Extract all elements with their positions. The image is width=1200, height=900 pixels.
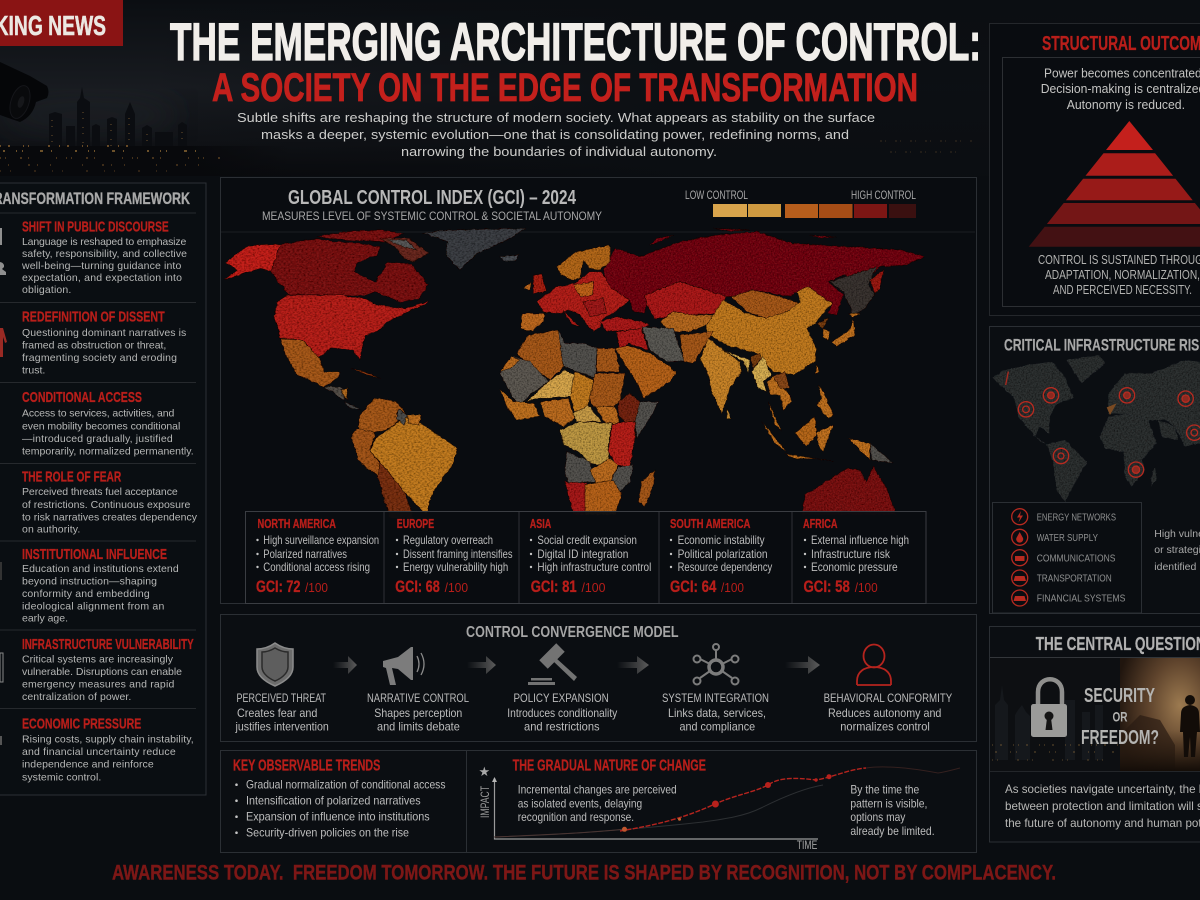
africa xyxy=(500,330,658,515)
table: regional summaries xyxy=(246,512,926,604)
image caption: OR xyxy=(1112,709,1128,725)
risk note: identified xyxy=(1154,561,1196,573)
region: south america: Resource dependency xyxy=(678,560,772,574)
arrow xyxy=(333,656,357,674)
region: africa: Infrastructure risk xyxy=(811,547,891,561)
region: europe: EUROPE xyxy=(397,517,434,531)
item: shift in public discourse: expectation, and expectation into xyxy=(22,272,182,284)
item: economic pressure: ECONOMIC PRESSURE xyxy=(22,715,141,732)
middle east xyxy=(600,317,713,398)
region: asia: ASIA xyxy=(530,517,551,531)
step descriptions: and limits debate xyxy=(377,720,460,734)
region: asia: GCI: 81 xyxy=(531,577,577,596)
item: the role of fear: on authority. xyxy=(22,524,80,536)
item: redefinition of dissent: framed as obstruction or threat, xyxy=(22,339,166,351)
trends list: Expansion of influence into institutions xyxy=(246,810,430,824)
intro text: Subtle shifts are reshaping the structure of modern society. What appears as stability on the surface xyxy=(237,110,875,125)
item: the role of fear: THE ROLE OF FEAR xyxy=(22,469,121,486)
intro text: masks a deeper, systemic evolution—one that is consolidating power, redefining norms, and xyxy=(261,127,849,142)
item: the role of fear xyxy=(22,469,198,536)
image caption: SECURITY xyxy=(1084,685,1155,707)
arrow xyxy=(617,656,649,674)
item: economic pressure: Rising costs, supply chain instability, xyxy=(22,733,194,745)
item: shift in public discourse: well-being—turning guidance into xyxy=(21,260,181,272)
risk legend: FINANCIAL SYSTEMS xyxy=(1037,594,1126,604)
panel: critical infrastructure risk xyxy=(990,326,1200,614)
region: africa: GCI: 58 xyxy=(804,577,850,596)
region: north america: Polarized narratives xyxy=(263,547,347,561)
step labels xyxy=(236,691,952,705)
risk legend: ENERGY NETWORKS xyxy=(1037,512,1116,524)
item: redefinition of dissent: Questioning dominant narratives is xyxy=(22,327,186,339)
item: institutional influence xyxy=(22,546,179,625)
icon: shield xyxy=(257,643,293,686)
region: south america: Political polarization xyxy=(678,547,768,561)
region: south america: SOUTH AMERICA xyxy=(670,517,750,531)
chart note left xyxy=(518,783,677,824)
region: europe: Regulatory overreach xyxy=(403,533,493,547)
item: redefinition of dissent: trust. xyxy=(22,365,45,377)
region: africa: Economic pressure xyxy=(811,560,898,574)
region: north america: /100 xyxy=(305,580,328,595)
intro text xyxy=(237,110,875,159)
arrow xyxy=(785,656,820,674)
item: shift in public discourse: safety, responsibility, and collective xyxy=(22,248,187,260)
item: shift in public discourse: SHIFT IN PUBLIC DISCOURSE xyxy=(22,219,169,236)
item: institutional influence: INSTITUTIONAL INFLUENCE xyxy=(22,546,167,563)
region: north america: Conditional access rising xyxy=(263,560,370,574)
step labels: POLICY EXPANSION xyxy=(514,691,609,705)
step labels: SYSTEM INTEGRATION xyxy=(662,691,769,705)
item: institutional influence: conformity and embedding xyxy=(22,588,150,600)
title xyxy=(170,13,981,110)
region: south america: GCI: 64 xyxy=(670,577,717,596)
europe xyxy=(521,245,630,332)
line chart: IMPACT xyxy=(478,786,492,818)
region: asia: /100 xyxy=(582,580,606,595)
region: europe: /100 xyxy=(445,580,468,595)
item: institutional influence: beyond instruction—shaping xyxy=(22,575,157,587)
region: africa: External influence high xyxy=(811,533,909,547)
chart note right: options may xyxy=(850,810,905,824)
step descriptions: Shapes perception xyxy=(374,706,462,720)
item: the role of fear: to risk narratives creates dependency xyxy=(22,512,198,524)
panel: the central question xyxy=(990,626,1200,842)
region: south america: Economic instability xyxy=(678,533,765,547)
item: conditional access: CONDITIONAL ACCESS xyxy=(22,389,142,406)
icon: greenland xyxy=(424,228,525,270)
chart note left: recognition and response. xyxy=(518,810,634,824)
chart note right: pattern is visible, xyxy=(850,797,927,811)
risk legend: COMMUNICATIONS xyxy=(1037,554,1116,564)
pyramid xyxy=(1029,121,1200,247)
map heading: MEASURES LEVEL OF SYSTEMIC CONTROL & SOCIETAL AUTONOMY xyxy=(262,209,602,223)
chart heading: THE GRADUAL NATURE OF CHANGE xyxy=(513,758,706,775)
line chart xyxy=(478,767,960,852)
item: conditional access xyxy=(22,389,194,458)
trends list: Gradual normalization of conditional access xyxy=(246,778,446,792)
step descriptions: normalizes control xyxy=(840,720,930,734)
item: infrastructure vulnerability: Critical systems are increasingly xyxy=(22,654,174,666)
icon: padlock xyxy=(1031,679,1067,737)
image caption xyxy=(1081,685,1159,749)
legend: control scale: HIGH CONTROL xyxy=(851,188,916,202)
region: south america: /100 xyxy=(721,580,744,595)
icon: person xyxy=(857,644,891,685)
item: conditional access: even mobility becomes conditional xyxy=(22,420,180,432)
region: europe xyxy=(395,517,513,596)
item: infrastructure vulnerability: centralization of power. xyxy=(22,691,131,703)
south america xyxy=(351,398,458,518)
step descriptions: and restrictions xyxy=(524,720,600,734)
panel: global control index xyxy=(220,178,976,604)
breaking news banner xyxy=(0,0,123,46)
item: economic pressure: systemic control. xyxy=(22,772,101,784)
chart note left: as isolated events, delaying xyxy=(518,797,642,811)
item: economic pressure: independence and reinforce xyxy=(22,759,154,771)
region: asia xyxy=(530,517,651,596)
region: north america: NORTH AMERICA xyxy=(258,517,336,531)
map heading: GLOBAL CONTROL INDEX (GCI) – 2024 xyxy=(288,187,577,209)
item: conditional access: temporarily, normalized permanently. xyxy=(22,446,194,458)
region: north america: High surveillance expansion xyxy=(263,533,379,547)
line chart: TIME xyxy=(797,838,817,852)
chart note right xyxy=(850,783,935,838)
risk note xyxy=(1154,528,1200,573)
step descriptions: Creates fear and xyxy=(237,706,317,720)
item: economic pressure xyxy=(22,715,194,784)
outcomes caption xyxy=(1038,252,1200,297)
region: europe: Dissent framing intensifies xyxy=(403,547,513,561)
item: shift in public discourse: Language is reshaped to emphasize xyxy=(22,236,186,248)
risk legend: WATER SUPPLY xyxy=(1037,533,1098,544)
outcomes text xyxy=(1041,66,1200,112)
icon: network xyxy=(694,644,738,684)
step labels: NARRATIVE CONTROL xyxy=(367,691,469,705)
legend: control scale: LOW CONTROL xyxy=(685,188,748,202)
panel: key observable trends xyxy=(220,750,466,852)
panel: structural outcomes xyxy=(990,24,1200,316)
region: asia: Social credit expansion xyxy=(537,533,637,547)
item: institutional influence: Education and institutions extend xyxy=(22,563,179,575)
legend: control scale xyxy=(685,188,916,218)
trends list xyxy=(235,778,446,840)
question text xyxy=(1005,783,1200,830)
risk legend xyxy=(992,502,1142,613)
trends list: Security-driven policies on the rise xyxy=(246,826,409,840)
south and southeast asia xyxy=(700,338,893,463)
risk world map xyxy=(992,355,1200,502)
item: shift in public discourse xyxy=(21,219,187,296)
step descriptions: Reduces autonomy and xyxy=(828,706,941,720)
central and east asia xyxy=(645,267,883,375)
chart note right: already be limited. xyxy=(850,824,935,838)
item: redefinition of dissent: REDEFINITION OF DISSENT xyxy=(22,309,165,326)
item: institutional influence: ideological alignment from an xyxy=(22,600,164,612)
step labels: BEHAVIORAL CONFORMITY xyxy=(824,691,952,705)
step descriptions: Introduces conditionality xyxy=(507,706,617,720)
icon: gavel xyxy=(528,643,577,685)
item: infrastructure vulnerability xyxy=(22,636,194,703)
intro text: narrowing the boundaries of individual autonomy. xyxy=(401,144,717,159)
panel: gradual nature of change xyxy=(466,750,976,852)
region: europe: Energy vulnerability high xyxy=(403,560,508,574)
item: redefinition of dissent xyxy=(22,309,186,377)
item: the role of fear: Perceived threats fuel acceptance xyxy=(22,486,178,498)
panel: transformation framework xyxy=(0,183,206,795)
icon: megaphone xyxy=(383,647,424,685)
outcomes text: Autonomy is reduced. xyxy=(1067,97,1185,112)
region: africa xyxy=(803,517,909,596)
region: north america xyxy=(256,517,379,596)
step descriptions: Links data, services, xyxy=(668,706,766,720)
panel: control convergence model xyxy=(220,614,976,742)
item: infrastructure vulnerability: vulnerable. Disruptions can enable xyxy=(22,666,182,678)
item: infrastructure vulnerability: INFRASTRUCTURE VULNERABILITY xyxy=(22,636,194,653)
australia xyxy=(802,467,897,515)
icon fragments at the cropped edge xyxy=(0,228,7,745)
icon: surveillance camera xyxy=(0,62,48,122)
chart note right: By the time the xyxy=(850,783,920,797)
city skyline backdrop xyxy=(0,0,1200,176)
north america xyxy=(224,230,428,410)
region: africa: /100 xyxy=(855,580,878,595)
item: redefinition of dissent: fragmenting society and eroding xyxy=(22,352,177,364)
risk legend: TRANSPORTATION xyxy=(1037,574,1112,584)
item: conditional access: Access to services, activities, and xyxy=(22,408,174,420)
region: asia: High infrastructure control xyxy=(537,560,651,574)
item: conditional access: —introduced gradually, justified xyxy=(22,433,173,445)
map heading xyxy=(262,187,602,223)
item: the role of fear: of restrictions. Continuous exposure xyxy=(22,499,190,511)
item: institutional influence: early age. xyxy=(22,613,68,625)
region: south america xyxy=(670,517,772,596)
region: north america: GCI: 72 xyxy=(256,577,300,596)
trends heading: KEY OBSERVABLE TRENDS xyxy=(233,758,381,775)
title: A SOCIETY ON THE EDGE OF TRANSFORMATION xyxy=(212,66,918,110)
step labels: PERCEIVED THREAT xyxy=(236,691,327,705)
risk markers xyxy=(1018,388,1200,477)
image caption: FREEDOM? xyxy=(1081,727,1159,749)
model heading: CONTROL CONVERGENCE MODEL xyxy=(466,624,679,641)
world map: americas xyxy=(224,228,525,518)
region: africa: AFRICA xyxy=(803,517,837,531)
item: shift in public discourse: obligation. xyxy=(22,284,71,296)
item: infrastructure vulnerability: emergency measures and rapid xyxy=(22,679,174,691)
region: europe: GCI: 68 xyxy=(395,577,440,596)
icon: silhouette figure xyxy=(1180,695,1200,757)
step descriptions xyxy=(235,706,941,734)
chart note left: Incremental changes are perceived xyxy=(518,783,677,797)
item: economic pressure: and financial uncertainty reduce xyxy=(22,746,176,758)
region: asia: Digital ID integration xyxy=(537,547,628,561)
step descriptions: and compliance xyxy=(680,720,755,734)
step descriptions: justifies intervention xyxy=(235,720,329,734)
image: security versus freedom xyxy=(990,658,1200,771)
icon: star: ★ xyxy=(478,764,490,779)
trends list: Intensification of polarized narratives xyxy=(246,794,421,808)
world map: europe, africa, asia and oceania xyxy=(500,228,925,515)
russia xyxy=(603,232,925,315)
arrow xyxy=(467,656,496,674)
